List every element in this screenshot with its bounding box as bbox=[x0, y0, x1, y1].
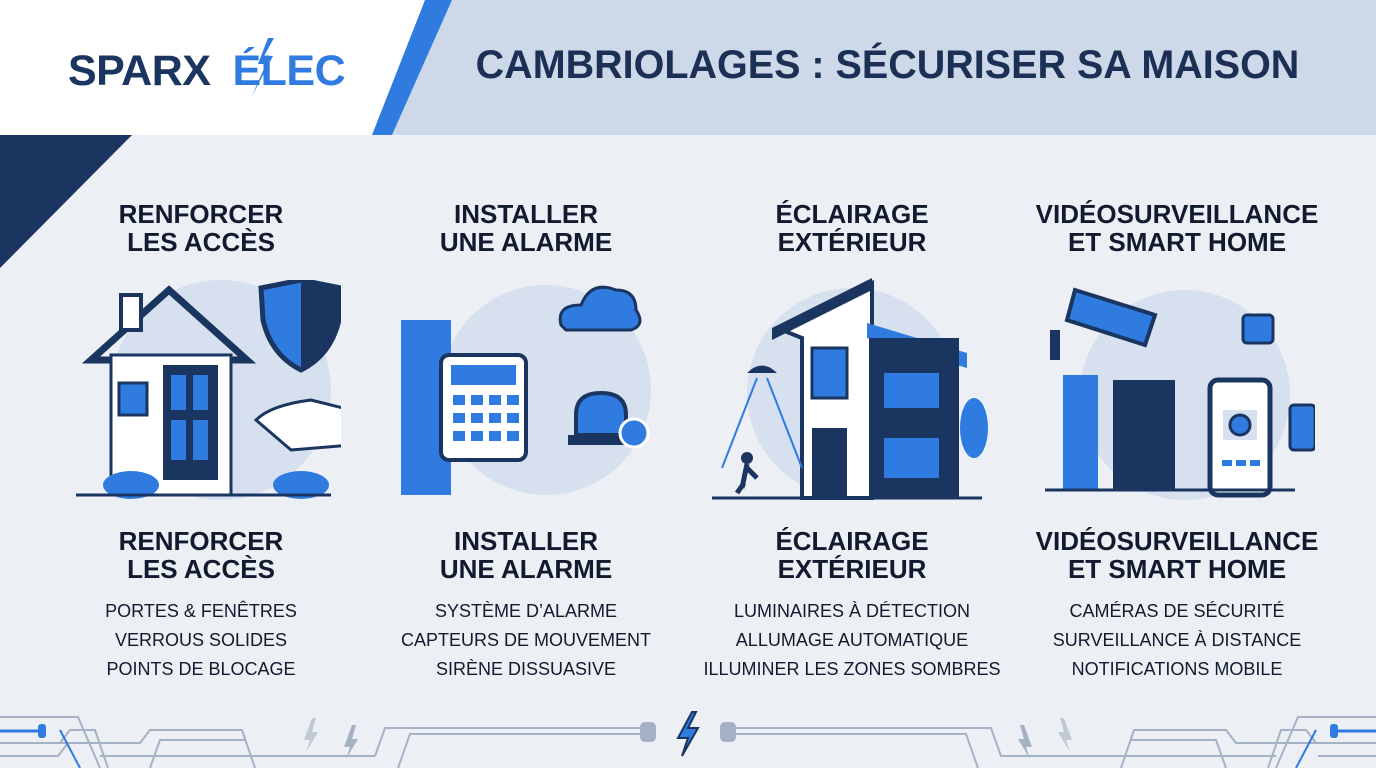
panel: alarme: INSTALLER bbox=[454, 526, 598, 556]
panel: renforcer: VERROUS SOLIDES bbox=[115, 630, 287, 650]
footer circuit decoration bbox=[0, 711, 1376, 768]
panel: video bbox=[1036, 199, 1318, 679]
panel: alarme: INSTALLER bbox=[454, 199, 598, 229]
panel: renforcer: PORTES & FENÊTRES bbox=[105, 601, 297, 621]
icon: house with lights bbox=[712, 278, 988, 500]
panel: eclairage: ÉCLAIRAGE bbox=[775, 526, 929, 556]
panel: video: ET SMART HOME bbox=[1068, 554, 1286, 584]
icon: house with shield bbox=[76, 280, 341, 500]
icon: lightning bbox=[252, 38, 274, 96]
icon: lightning center bbox=[678, 712, 698, 756]
header background bbox=[0, 0, 1376, 268]
panel: alarme: CAPTEURS DE MOUVEMENT bbox=[401, 630, 651, 650]
panel: alarme bbox=[401, 199, 651, 679]
panel: renforcer: POINTS DE BLOCAGE bbox=[106, 659, 296, 679]
icon: alarm keypad and siren bbox=[401, 285, 651, 495]
panel: renforcer: RENFORCER bbox=[119, 199, 283, 229]
panel: video: VIDÉOSURVEILLANCE bbox=[1036, 199, 1318, 229]
panel: renforcer: LES ACCÈS bbox=[127, 227, 275, 257]
panel: video: SURVEILLANCE À DISTANCE bbox=[1053, 630, 1301, 650]
panel: video: NOTIFICATIONS MOBILE bbox=[1072, 659, 1282, 679]
panel: video: ET SMART HOME bbox=[1068, 227, 1286, 257]
panel: video: VIDÉOSURVEILLANCE bbox=[1036, 526, 1318, 556]
panel: eclairage: EXTÉRIEUR bbox=[778, 554, 926, 584]
panel: renforcer: RENFORCER bbox=[119, 526, 283, 556]
logo: SPARX ÉLEC bbox=[68, 47, 345, 95]
panel: eclairage: ÉCLAIRAGE bbox=[775, 199, 929, 229]
panel: alarme: UNE ALARME bbox=[440, 227, 612, 257]
panel: video: CAMÉRAS DE SÉCURITÉ bbox=[1069, 601, 1285, 621]
panel: alarme: SYSTÈME D’ALARME bbox=[435, 601, 617, 621]
panel: eclairage: LUMINAIRES À DÉTECTION bbox=[734, 601, 970, 621]
panel: alarme: UNE ALARME bbox=[440, 554, 612, 584]
icon: camera and smartphone bbox=[1045, 288, 1315, 500]
panel: eclairage bbox=[703, 199, 1001, 679]
panel: eclairage: EXTÉRIEUR bbox=[778, 227, 926, 257]
title: CAMBRIOLAGES : SÉCURISER SA MAISON bbox=[476, 43, 1299, 87]
panel: alarme: SIRÈNE DISSUASIVE bbox=[436, 659, 616, 679]
panel: renforcer: LES ACCÈS bbox=[127, 554, 275, 584]
panel: renforcer bbox=[76, 199, 341, 679]
panel: eclairage: ILLUMINER LES ZONES SOMBRES bbox=[703, 659, 1001, 679]
panel: eclairage: ALLUMAGE AUTOMATIQUE bbox=[736, 630, 968, 650]
